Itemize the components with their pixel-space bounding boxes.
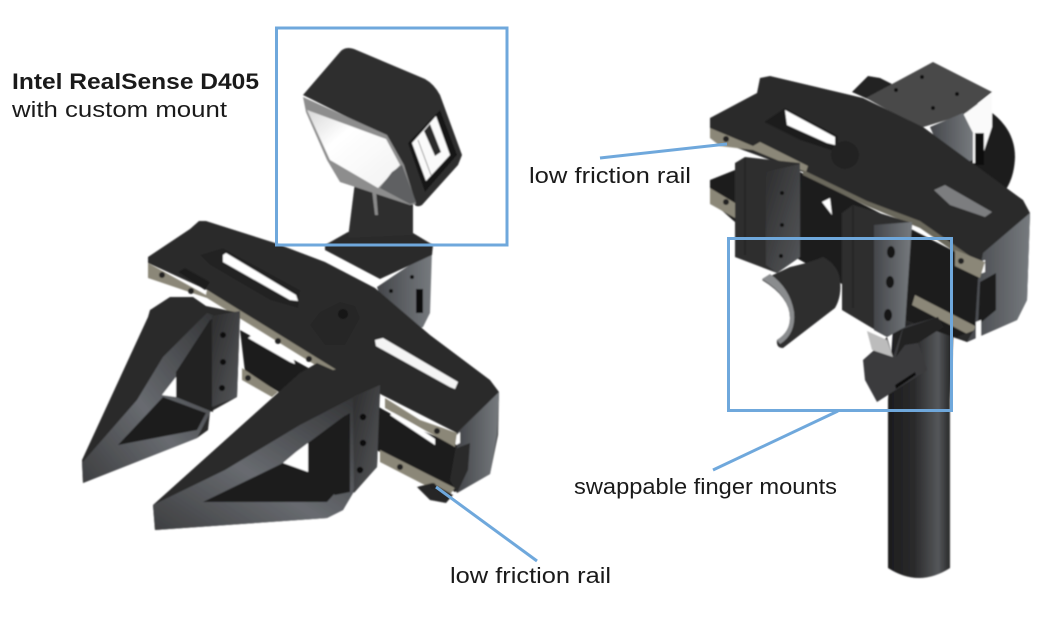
label: right low friction rail: low friction rail <box>529 163 691 188</box>
finger mount highlight box <box>728 238 952 410</box>
mount tube <box>888 300 955 578</box>
arrow: left low friction rail leader <box>436 487 537 561</box>
right side block <box>967 213 1030 342</box>
mount stem <box>348 175 413 238</box>
camera highlight box <box>276 28 507 245</box>
front finger <box>153 363 380 530</box>
left finger block <box>735 157 800 273</box>
rear knob <box>852 76 892 100</box>
label: camera mount note: with custom mount <box>11 97 227 122</box>
pivot <box>831 141 859 169</box>
right gripper render <box>710 62 1030 578</box>
slot two <box>934 185 992 217</box>
slot recess <box>200 248 300 308</box>
camera mount base <box>325 232 433 279</box>
lower rail <box>240 330 470 503</box>
slot one recess <box>764 108 838 152</box>
camera body <box>303 48 462 206</box>
label: bottom low friction rail: low friction rail <box>450 563 611 588</box>
main plate with slots <box>148 221 499 493</box>
top rail <box>148 263 340 376</box>
camera back box <box>377 250 432 340</box>
left gripper render <box>82 48 499 530</box>
side port window <box>408 110 457 192</box>
slot one <box>785 110 835 145</box>
lens face <box>303 97 416 205</box>
slot two <box>375 338 458 389</box>
right swappable finger <box>842 205 943 402</box>
camera with custom mount <box>303 48 462 238</box>
label: camera name: Intel RealSense D405 <box>12 69 259 94</box>
pivot lug <box>310 302 360 345</box>
arrow: right low friction rail leader <box>600 144 727 158</box>
upper rail <box>710 128 808 172</box>
left swappable finger <box>735 157 840 348</box>
right finger block <box>842 205 912 337</box>
rear finger <box>82 297 240 483</box>
rear disc <box>955 100 1015 205</box>
back box <box>866 62 992 165</box>
slot one <box>223 253 298 301</box>
main plate <box>710 76 1030 342</box>
right side block <box>457 392 499 493</box>
lower rail and inner frame <box>710 170 985 342</box>
arrow: swappable finger mounts leader <box>713 411 838 470</box>
label: swappable finger mounts: swappable finger mounts <box>574 474 837 499</box>
